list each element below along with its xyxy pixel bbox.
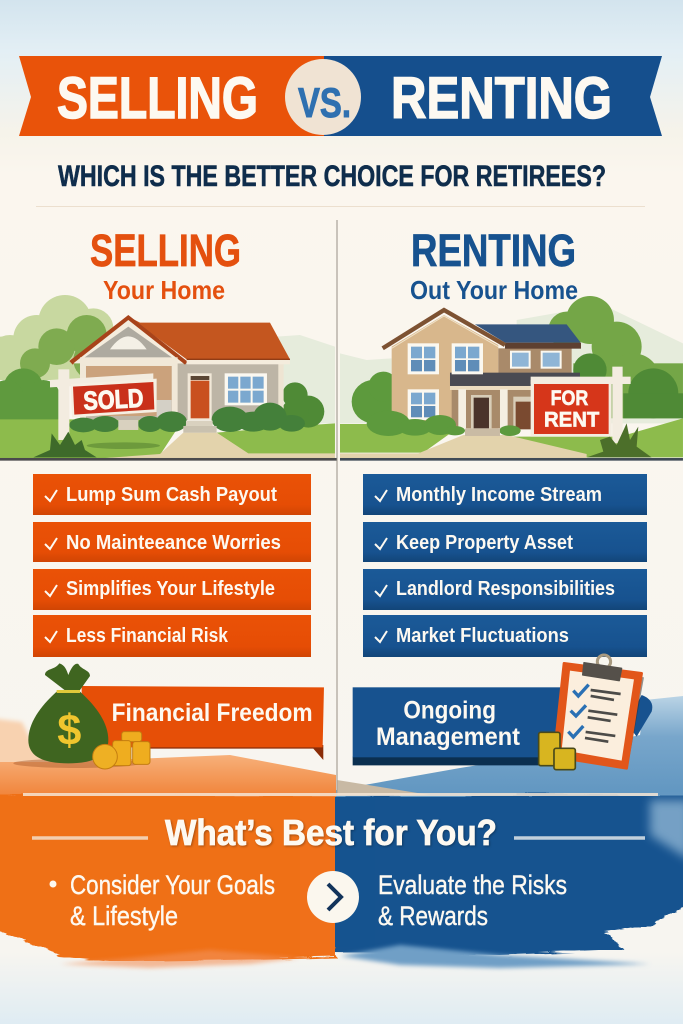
sold sign — [50, 369, 157, 440]
brush: blue panel — [335, 795, 683, 955]
callout label: Management — [376, 724, 520, 751]
item: landlord: Landlord Responsibilities — [396, 578, 615, 600]
item: landlord — [363, 569, 647, 610]
brush: pale peach wash — [0, 718, 60, 790]
plant — [33, 432, 97, 457]
banner: blue half — [324, 56, 662, 136]
header banner — [19, 56, 662, 136]
heading: What’s Best for You? — [165, 812, 497, 853]
callout label — [376, 697, 520, 751]
heading: selling your home: SELLING — [90, 225, 241, 276]
illustration: sold house — [0, 295, 337, 461]
text: goals — [50, 870, 275, 931]
item: lump sum — [33, 474, 311, 515]
item: no maintenance: No Mainteeance Worries — [66, 532, 281, 554]
steps — [118, 420, 217, 433]
title: selling: SELLING — [57, 66, 258, 131]
brush: blue seam fill — [335, 797, 375, 947]
for rent sign: RENT — [544, 408, 599, 432]
hills — [340, 307, 683, 423]
text: goals: Consider Your Goals — [70, 870, 275, 900]
item: monthly income — [363, 474, 647, 515]
callout label: Ongoing — [403, 697, 496, 724]
panel: what's best for you — [23, 794, 658, 931]
brush: upper orange wash — [0, 755, 336, 800]
icon: money bag: $ — [57, 707, 81, 755]
text: risks: Evaluate the Risks — [378, 870, 567, 900]
item: market: Market Fluctuations — [396, 625, 569, 647]
door — [188, 373, 212, 420]
item: less risk — [33, 615, 311, 657]
house body — [69, 315, 290, 420]
title: renting: RENTING — [391, 66, 612, 131]
item: market — [363, 615, 647, 657]
brush: pale right edge — [650, 800, 683, 860]
brush: pale blue bottom stroke — [340, 945, 650, 968]
plant — [587, 423, 652, 457]
text: risks: & Rewards — [378, 901, 488, 931]
brush: seam fill — [300, 797, 335, 955]
ribbon — [353, 687, 561, 765]
shrubs — [367, 411, 521, 436]
for rent sign — [531, 367, 631, 443]
item: less risk: Less Financial Risk — [66, 625, 229, 647]
windows — [408, 343, 562, 420]
list: renting factors — [363, 474, 647, 657]
ribbon fold — [147, 745, 323, 760]
heading: renting out your home: RENTING — [411, 225, 576, 276]
banner: orange half — [19, 56, 324, 136]
item: simplifies: Simplifies Your Lifestyle — [66, 578, 275, 600]
house — [383, 310, 581, 429]
brush: tan wedge — [337, 780, 430, 795]
callout: financial freedom — [13, 663, 324, 769]
list: selling benefits — [33, 474, 311, 657]
window — [225, 373, 267, 405]
lawn — [0, 419, 335, 459]
steps — [465, 429, 500, 436]
callout: ongoing management — [353, 655, 652, 770]
brush: orange panel — [0, 795, 335, 962]
trees — [0, 295, 113, 420]
heading: renting out your home: Out Your Home — [410, 275, 578, 305]
icon: coins — [539, 732, 575, 770]
text: risks — [378, 870, 567, 931]
bush — [281, 382, 324, 428]
item: keep property: Keep Property Asset — [396, 532, 573, 554]
heading: selling your home: Your Home — [103, 275, 225, 305]
item: lump sum: Lump Sum Cash Payout — [66, 484, 277, 506]
heading: renting out your home — [410, 225, 578, 305]
item: keep property — [363, 522, 647, 562]
ribbon — [82, 686, 324, 747]
brush: upper blue wash — [336, 695, 683, 800]
icon: arrow button — [307, 871, 359, 923]
item: monthly income: Monthly Income Stream — [396, 484, 602, 506]
vs label: VS. — [298, 79, 351, 126]
text: goals: & Lifestyle — [70, 901, 178, 931]
illustration: for rent house — [340, 296, 683, 461]
icon: money bag — [13, 663, 140, 768]
heading: selling your home — [90, 225, 241, 305]
for rent sign: FOR — [551, 386, 588, 410]
icon: clipboard — [553, 655, 644, 769]
sold sign: SOLD — [83, 383, 144, 416]
icon: coins — [93, 732, 150, 769]
brush behind clipboard — [627, 695, 652, 737]
trees — [352, 296, 683, 423]
item: simplifies — [33, 569, 311, 610]
callout label: Financial Freedom — [112, 699, 313, 727]
item: no maintenance — [33, 522, 311, 562]
vs circle — [285, 59, 361, 135]
brush: orange bottom streaks — [60, 950, 300, 968]
lawn — [340, 418, 683, 459]
shrubs — [69, 403, 305, 432]
